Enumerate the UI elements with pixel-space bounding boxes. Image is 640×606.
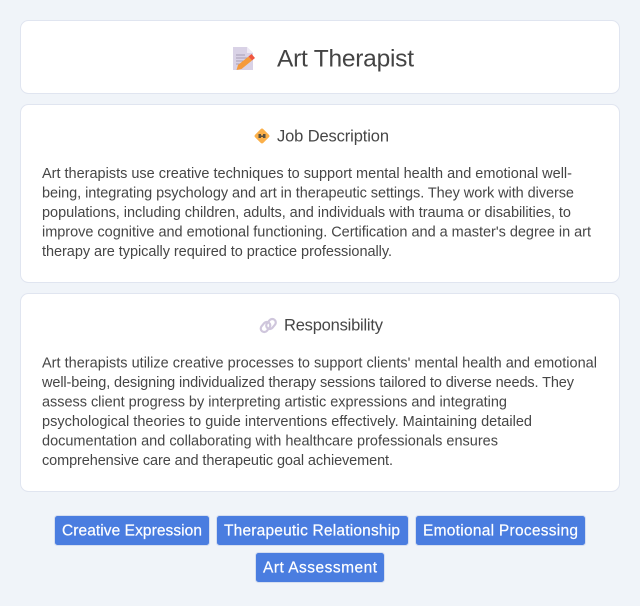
text block: job description: Art therapists use creative techniques to support mental health and emotional well- [42, 166, 572, 182]
icon: document with pencil [233, 47, 255, 70]
panel: title card [20, 20, 620, 94]
text block: job description: improve cognitive and emotional functioning. Certification and a master's degree in art [42, 224, 591, 240]
title: Art Therapist [277, 46, 414, 72]
text block: job description: therapy are typically required to practice professionally. [42, 244, 392, 260]
tag: emotional processing: Emotional Processing [423, 522, 578, 540]
panel: job description [20, 104, 620, 282]
text block: responsibility: well-being, designing individualized therapy sessions tailored to diverse needs. They [41, 375, 575, 391]
text block: responsibility: assess client progress by interpreting artistic expressions and integrating [42, 394, 507, 410]
text block: responsibility: psychological theories to guide interventions effectively. Maintaining detailed [42, 414, 532, 430]
text block: job description: populations, including children, adults, and individuals with trauma or disabilities, to [42, 205, 571, 221]
text block: responsibility: documentation and collaborating with healthcare professionals ensures [42, 434, 498, 450]
tags [54, 516, 586, 582]
tag: therapeutic relationship: Therapeutic Relationship [224, 522, 400, 540]
icon: chain link [259, 318, 277, 333]
tag: art assessment: Art Assessment [263, 560, 378, 576]
text block: job description: being, integrating psychology and art in therapeutic settings. They work with diverse [42, 186, 574, 202]
text block: responsibility: Art therapists utilize creative processes to support clients' mental health and emotional [42, 356, 597, 372]
tag: creative expression: Creative Expression [62, 522, 202, 540]
icon: job description diamond [254, 128, 270, 144]
tag: art assessment [256, 552, 384, 582]
tag: creative expression [54, 516, 210, 546]
text block: responsibility: comprehensive care and therapeutic goal achievement. [42, 453, 393, 469]
text block: job description [42, 166, 591, 260]
tag: therapeutic relationship [216, 516, 408, 546]
panel: responsibility [20, 294, 620, 492]
heading: responsibility: Responsibility [284, 316, 384, 334]
heading: job description: Job Description [277, 128, 389, 146]
tag: emotional processing [416, 516, 586, 546]
text block: responsibility [41, 356, 597, 469]
